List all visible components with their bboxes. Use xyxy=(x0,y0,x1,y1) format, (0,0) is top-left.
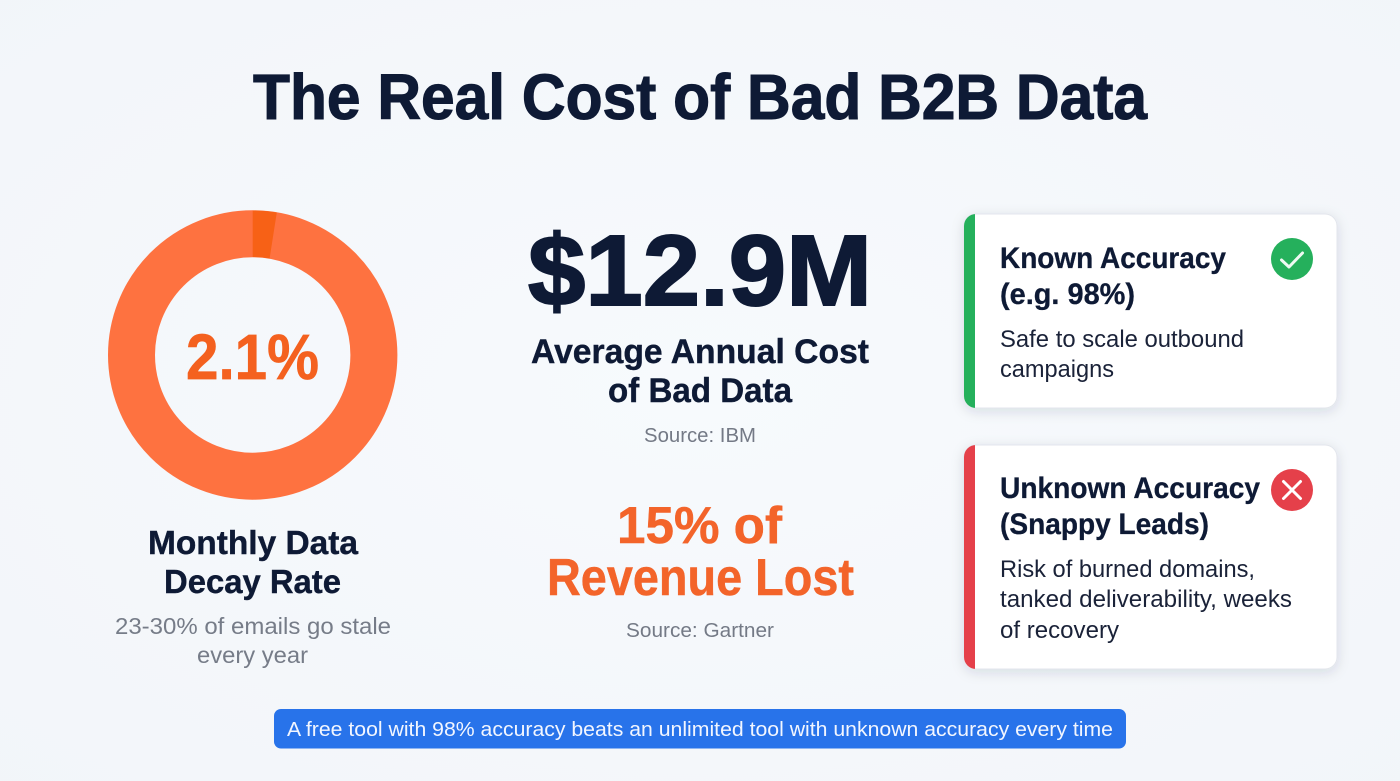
text: email staleness: 23-30% of emails go stale xyxy=(115,613,391,639)
text: unknown accuracy detail: tanked deliverability, weeks xyxy=(1000,586,1292,613)
source: Gartner: Source: Gartner xyxy=(626,620,774,642)
text: known accuracy detail xyxy=(1000,326,1244,383)
heading: average annual cost: of Bad Data xyxy=(608,372,793,410)
panel: cost statistics xyxy=(528,215,872,642)
source: IBM: Source: IBM xyxy=(644,425,756,447)
text: unknown accuracy detail: Risk of burned domains, xyxy=(1000,556,1255,583)
panel: monthly data decay xyxy=(115,210,391,668)
text: email staleness xyxy=(115,613,391,668)
heading: known accuracy: Known Accuracy xyxy=(1000,242,1226,275)
text: known accuracy detail: Safe to scale outbound xyxy=(1000,326,1244,353)
donut chart: 2.1% xyxy=(186,321,319,393)
heading: known accuracy: (e.g. 98%) xyxy=(1000,278,1135,311)
callout: takeaway banner xyxy=(274,709,1126,748)
text: unknown accuracy detail xyxy=(1000,556,1292,644)
panel: unknown accuracy card xyxy=(964,445,1337,669)
panel: known accuracy card xyxy=(964,214,1337,408)
text: unknown accuracy detail: of recovery xyxy=(1000,617,1119,644)
heading: average annual cost: Average Annual Cost xyxy=(531,333,869,371)
heading: unknown accuracy: Unknown Accuracy xyxy=(1000,472,1260,505)
icon: green check xyxy=(1271,238,1313,280)
stat: revenue lost: Revenue Lost xyxy=(547,549,854,607)
heading: unknown accuracy: (Snappy Leads) xyxy=(1000,508,1209,541)
donut chart xyxy=(132,210,374,476)
text: email staleness: every year xyxy=(197,642,308,668)
heading: average annual cost xyxy=(531,333,869,410)
heading: known accuracy xyxy=(1000,242,1226,311)
text: known accuracy detail: campaigns xyxy=(1000,356,1114,383)
stat: revenue lost xyxy=(547,497,854,607)
title: The Real Cost of Bad B2B Data xyxy=(253,61,1147,133)
callout: takeaway banner: A free tool with 98% accuracy beats an unlimited tool with unknown accuracy every time xyxy=(287,718,1113,741)
stat: 12.9M: $12.9M xyxy=(528,215,872,327)
heading: unknown accuracy xyxy=(1000,472,1260,541)
icon: red cross xyxy=(1271,469,1313,511)
heading: monthly data decay rate: Decay Rate xyxy=(164,563,341,600)
stat: revenue lost: 15% of xyxy=(617,497,783,555)
heading: monthly data decay rate: Monthly Data xyxy=(148,524,359,561)
heading: monthly data decay rate xyxy=(148,524,359,600)
